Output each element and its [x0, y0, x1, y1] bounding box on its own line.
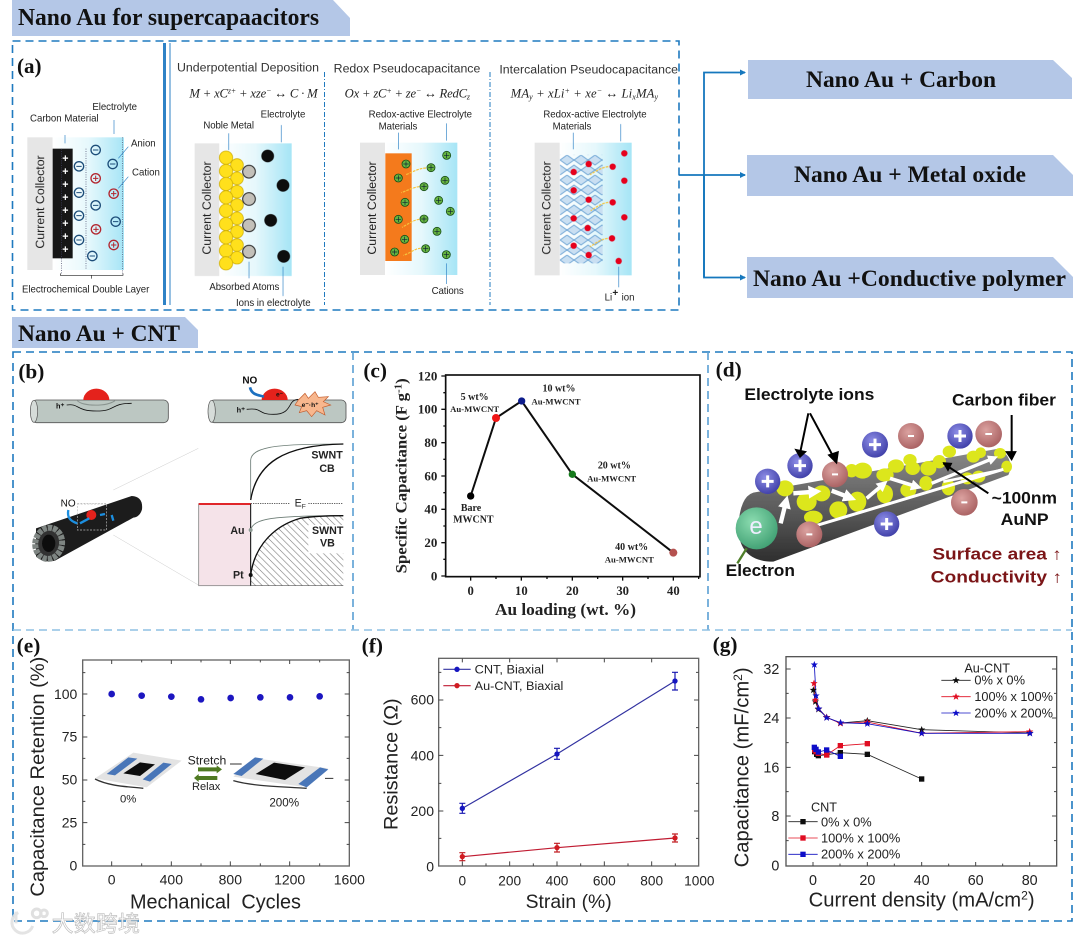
label (c): (c): [363, 358, 387, 382]
axis labels and annotations: 40: [667, 584, 680, 598]
labels: band diagram: SWNT: [311, 450, 343, 462]
labels: retention chart: 50: [62, 772, 78, 788]
labels: capacitance chart: 2: [731, 674, 745, 681]
label (e): (e): [17, 634, 40, 658]
formula: redox: +: [386, 86, 392, 95]
labels: capacitance chart: 24: [763, 711, 779, 727]
chart: capacitance lines: [786, 657, 1057, 866]
labels: resistance chart: 200: [498, 873, 521, 888]
axis labels and annotations: 40 wt%: [615, 542, 648, 553]
diagram: electrochemical double layer: +: [62, 244, 68, 256]
axis labels and annotations: 10: [515, 584, 528, 598]
box: Nano Au + Carbon: Nano Au + Carbon: [806, 67, 996, 92]
inset: stretchable device at 0% and 200%: [95, 753, 333, 788]
panel: (a) charge storage mechanisms: [12, 41, 679, 310]
illustration: nanotube with adsorbed NO: h⁺: [237, 405, 245, 414]
axis labels and annotations: 20: [424, 535, 437, 550]
labels: carbon fiber illustration: Electrolyte ions: [744, 386, 874, 404]
labels: resistance chart: Strain (%): [526, 892, 612, 913]
labels: band diagram: E: [295, 498, 302, 510]
panel: (d) AuNP decorated carbon fiber: [716, 358, 1062, 587]
labels: intercalation: [543, 110, 647, 304]
formula: intercalation: + xe: [570, 86, 597, 100]
labels: capacitance chart: Capacitance (mF/cm: [732, 683, 754, 867]
legend markers: [788, 677, 971, 857]
series: Au-CNT stars: [810, 661, 1034, 736]
labels: carbon fiber illustration: Conductivity ↑: [931, 569, 1062, 587]
labels: capacitance chart: Au-CNT: [964, 662, 1010, 676]
formula: redox: −: [416, 86, 421, 95]
schematic: redox electrode and cations: [360, 123, 457, 284]
label (b): (b): [18, 359, 44, 383]
labels: intercalation: Materials: [553, 121, 592, 132]
axis labels and annotations: Au loading (wt. %): [495, 600, 636, 619]
axis labels and annotations: -1: [394, 384, 405, 393]
formula: intercalation: + xLi: [533, 86, 565, 100]
labels: resistance chart: 600: [411, 692, 434, 708]
labels: resistance chart: 0: [426, 858, 434, 874]
formula: underpotential deposition: −: [266, 86, 271, 95]
diagram: underpotential deposition: [177, 61, 319, 309]
labels: resistance chart: 800: [640, 873, 663, 888]
illustration: black carbon nanotube: [32, 448, 198, 585]
labels: retention chart: Capacitance Retention (%): [28, 657, 49, 897]
label (a): (a): [17, 54, 42, 78]
schematic: layered host with lithium ions: Current Collector: [540, 161, 554, 255]
panel frame: Nano Au + CNT: [13, 352, 1072, 921]
labels: capacitance chart: 40: [914, 873, 930, 889]
labels: capacitance chart: Current density (mA/cm: [809, 889, 1019, 911]
schematic: yellow metal atoms and ions: Current Collector: [200, 161, 214, 255]
chart: retention scatter: [83, 660, 349, 866]
labels: carbon fiber illustration: AuNP: [1001, 511, 1049, 529]
labels: retention chart: 200%: [269, 797, 299, 810]
labels: capacitance chart: CNT: [811, 801, 837, 815]
chart: line chart: [441, 375, 700, 581]
labels: capacitance chart: ): [732, 667, 754, 674]
axis labels and annotations: 0: [468, 584, 474, 598]
title: underpotential deposition: Underpotential Deposition: [177, 61, 319, 75]
labels: band diagram: Pt: [233, 570, 244, 582]
labels: band diagram: F: [302, 504, 306, 511]
diagram: electrochemical double layer: +: [62, 179, 68, 191]
illustration: black carbon nanotube: NO: [61, 499, 76, 510]
labels: capacitance chart: 0% x 0%: [821, 815, 872, 829]
labels: carbon fiber illustration: [726, 386, 1062, 587]
diagram: electrochemical double layer: [27, 120, 128, 279]
labels: retention chart: Stretch: [188, 753, 226, 767]
formula: intercalation: MA: [635, 86, 655, 100]
labels: capacitance chart: 32: [763, 662, 779, 678]
axis labels and annotations: 30: [616, 584, 629, 598]
illustration: nanotube with adsorbed NO: NO: [242, 375, 258, 386]
formula: redox: z: [466, 93, 470, 102]
schematic: layered host with lithium ions: [535, 124, 632, 287]
labels: retention chart: [28, 657, 365, 913]
axis labels and annotations: 40: [424, 502, 437, 517]
formula: intercalation: +: [565, 86, 570, 95]
formula: underpotential deposition: ↔ C · M: [271, 86, 319, 100]
labels: retention chart: 25: [62, 815, 78, 831]
schematic: yellow metal atoms and ions: [195, 125, 292, 296]
label (g): (g): [713, 633, 738, 657]
axis labels and annotations: 5 wt%: [461, 392, 489, 403]
labels: capacitance chart: ): [1028, 889, 1035, 911]
diagram: intercalation pseudocapacitance: [499, 63, 678, 304]
title: intercalation pseudocapacitance: Intercalation Pseudocapacitance: [499, 63, 678, 77]
labels: capacitance chart: 20: [859, 873, 875, 889]
formula: underpotential deposition: z+: [227, 86, 236, 95]
box: Nano Au + Conductive polymer: [747, 257, 1073, 298]
illustration: nanotube with adsorbed NO: e⁻: [276, 392, 284, 399]
labels: double layer diagram: Anion: [131, 139, 156, 150]
formula: intercalation: ↔ Li: [602, 86, 633, 100]
labels: intercalation: ion: [622, 293, 635, 304]
labels: band diagram: Au: [230, 525, 245, 537]
heading: Nano Au for supercapacitors: [12, 0, 350, 36]
axis labels and annotations: 80: [424, 435, 437, 450]
labels: capacitance chart: 200% x 200%: [974, 706, 1053, 720]
axis labels and annotations: Au-MWCNT: [587, 474, 636, 484]
labels: capacitance chart: 0: [809, 873, 817, 889]
labels: underpotential deposition: Ions in electrolyte: [236, 298, 311, 309]
labels: capacitance chart: 2: [1021, 889, 1028, 903]
labels: resistance chart: CNT, Biaxial: [475, 663, 544, 677]
labels: redox: Cations: [432, 286, 464, 297]
panel: (c) specific capacitance vs Au loading: [363, 358, 700, 619]
axis labels and annotations: ): [394, 378, 411, 384]
labels: double layer diagram: Electrolyte: [92, 102, 137, 113]
label (f): (f): [362, 634, 383, 658]
labels: retention chart: 1200: [274, 872, 305, 888]
schematic: redox electrode and cations: Current Collector: [365, 161, 379, 255]
illustration: nanotube with adsorbed NO: [208, 375, 346, 423]
axis labels and annotations: MWCNT: [453, 515, 494, 526]
axis labels and annotations: 20 wt%: [598, 461, 631, 472]
chart: band energy diagram: [199, 444, 345, 586]
diagram: electrochemical double layer: Current Collector: [33, 155, 47, 249]
labels: intercalation: Li: [605, 293, 612, 304]
arrows: branch to three categories: [679, 72, 745, 278]
labels: underpotential deposition: Electrolyte: [261, 109, 305, 120]
panel: (e) capacitance retention: [17, 634, 365, 913]
labels: capacitance chart: 80: [1022, 873, 1038, 889]
labels: double layer diagram: Cation: [132, 167, 160, 178]
watermark: 大数跨境: [12, 907, 140, 939]
labels: double layer diagram: [22, 102, 160, 295]
labels: capacitance chart: 200% x 200%: [821, 848, 900, 862]
axis labels and annotations: Bare: [461, 503, 482, 514]
diagram: redox pseudocapacitance: [334, 61, 480, 297]
illustration: nanotube with gold particle: [30, 389, 168, 423]
formula: intercalation: MA: [511, 86, 529, 100]
labels: band diagram: VB: [320, 538, 335, 550]
diagram: electrochemical double layer: +: [62, 231, 68, 243]
diagram: electrochemical double layer: +: [62, 205, 68, 217]
axis labels and annotations: 10 wt%: [542, 383, 576, 394]
axis labels and annotations: 0: [431, 568, 437, 583]
labels: underpotential deposition: Noble Metal: [203, 121, 254, 132]
illustration: carbon fiber with nanoparticles and ions: [736, 413, 1016, 563]
watermark: 大数跨境: 大数跨境: [52, 907, 140, 939]
diagram: electrochemical double layer: +: [62, 153, 68, 165]
labels: capacitance chart: 100% x 100%: [974, 690, 1053, 704]
labels: resistance chart: Resistance (Ω): [381, 698, 402, 830]
formula: intercalation: x: [631, 93, 636, 102]
labels: capacitance chart: 100% x 100%: [821, 832, 900, 846]
labels: resistance chart: 200: [411, 803, 434, 819]
labels: capacitance chart: [731, 662, 1053, 911]
labels: retention chart: 1600: [334, 872, 365, 888]
diagram: electrochemical double layer: +: [62, 192, 68, 204]
labels: redox: Materials: [379, 121, 418, 132]
formula: intercalation: −: [597, 86, 602, 95]
formula: redox: + ze: [392, 86, 417, 100]
labels: underpotential deposition: Absorbed Atoms: [209, 282, 280, 293]
labels: capacitance chart: 60: [968, 873, 984, 889]
axis labels and annotations: Au-MWCNT: [605, 554, 654, 564]
labels: redox: Redox-active Electrolyte: [369, 110, 472, 121]
axis labels and annotations: 100: [418, 402, 437, 417]
labels: retention chart: 75: [62, 729, 78, 745]
formula: underpotential deposition: M + xC: [189, 86, 228, 100]
series: CNT squares: [812, 741, 924, 782]
labels: resistance chart: 600: [593, 873, 616, 888]
axis labels and annotations: 20: [566, 584, 579, 598]
labels: intercalation: Redox-active Electrolyte: [543, 110, 647, 121]
icon: watermark logo: [12, 909, 47, 933]
labels: capacitance chart: 16: [763, 760, 779, 776]
axis labels and annotations: Specific Capacitance (F g: [394, 408, 411, 573]
illustration: nanotube with adsorbed NO: e⁻·h⁺: [302, 402, 319, 409]
labels: retention chart: Relax: [192, 781, 221, 793]
formula: redox: Ox + zC: [345, 86, 387, 100]
diagram: electrochemical double layer: +: [62, 218, 68, 230]
labels: resistance chart: 400: [546, 873, 569, 888]
axis labels and annotations: [394, 368, 680, 619]
axis labels and annotations: 60: [424, 468, 437, 483]
labels: resistance chart: Au-CNT, Biaxial: [475, 679, 563, 693]
labels: capacitance chart: 0: [771, 858, 779, 874]
labels: double layer diagram: Carbon Material: [30, 114, 99, 125]
labels: underpotential deposition: [203, 109, 311, 309]
labels: retention chart: 0%: [120, 794, 136, 806]
labels: carbon fiber illustration: Carbon fiber: [952, 391, 1057, 409]
labels: intercalation: +: [612, 288, 618, 299]
labels: retention chart: 0: [70, 858, 78, 874]
labels: resistance chart: 0: [459, 873, 467, 888]
heading: Nano Au + CNT: Nano Au + CNT: [18, 321, 180, 346]
labels: band diagram: SWNT: [312, 525, 344, 537]
panel: (g) capacitance vs current density: [713, 633, 1057, 911]
heading: Nano Au for supercapacitors: Nano Au for supercapaacitors: [18, 5, 319, 31]
formula: underpotential deposition: + xze: [236, 86, 267, 100]
diagram: electrochemical double layer: +: [62, 166, 68, 178]
labels: carbon fiber illustration: ~100nm: [992, 489, 1057, 507]
labels: resistance chart: 400: [411, 747, 434, 763]
axis labels and annotations: Au-MWCNT: [531, 397, 581, 407]
labels: retention chart: 0: [108, 872, 116, 888]
box: Nano Au + Carbon: [748, 60, 1072, 99]
labels: resistance chart: [381, 663, 715, 913]
panel: (b) gas sensing nanotube schematic: [18, 359, 346, 586]
label (d): (d): [716, 358, 742, 382]
labels: retention chart: 400: [160, 872, 183, 888]
labels: retention chart: 800: [219, 872, 242, 888]
box: Nano Au + Conductive polymer: Nano Au +Conductive polymer: [753, 266, 1066, 291]
labels: carbon fiber illustration: Electron: [726, 562, 795, 580]
labels: band diagram: CB: [319, 463, 335, 475]
labels: carbon fiber illustration: Surface area ↑: [932, 545, 1062, 563]
labels: retention chart: Mechanical Cycles: [130, 891, 301, 913]
box: Nano Au + Metal oxide: Nano Au + Metal oxide: [794, 162, 1026, 187]
labels: double layer diagram: Electrochemical Double Layer: [22, 284, 150, 295]
panel: (f) resistance vs strain: [362, 634, 715, 913]
labels: band diagram: [230, 450, 344, 582]
formula: intercalation: y: [653, 93, 658, 102]
labels: redox: [369, 110, 472, 297]
labels: retention chart: 100: [54, 686, 78, 702]
formula: intercalation: y: [528, 93, 533, 102]
box: Nano Au + Metal oxide: [747, 155, 1073, 196]
formula: redox: ↔ RedC: [421, 86, 468, 100]
labels: capacitance chart: 0% x 0%: [974, 674, 1025, 688]
illustration: nanotube with gold particle: h⁺: [56, 401, 64, 410]
chart: resistance lines: [439, 658, 699, 866]
axis labels and annotations: 120: [418, 368, 437, 383]
heading: Nano Au + CNT: [12, 317, 198, 348]
labels: capacitance chart: 8: [771, 809, 779, 825]
title: redox pseudocapacitance: Redox Pseudocapacitance: [334, 61, 480, 75]
axis labels and annotations: Au-MWCNT: [450, 404, 499, 414]
labels: resistance chart: 1000: [684, 873, 715, 888]
labels: carbon fiber illustration: e: [749, 513, 763, 540]
